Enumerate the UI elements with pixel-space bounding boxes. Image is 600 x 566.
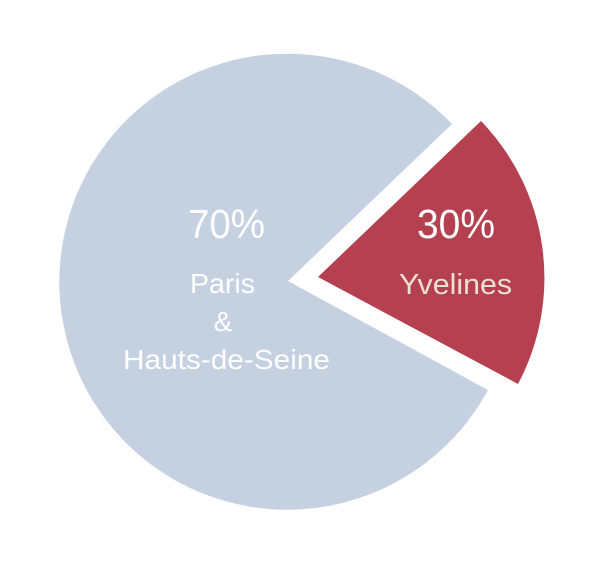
label: Yvelines: Yvelines (399, 269, 512, 301)
label: 30%: 30% (417, 201, 495, 247)
pie slice: 30% Yvelines (318, 121, 544, 384)
pie slice: 70% Paris & Hauts-de-Seine (59, 54, 488, 510)
label: Paris: Paris (190, 268, 255, 299)
label: Hauts-de-Seine: Hauts-de-Seine (123, 344, 330, 375)
label: ampersand: & (214, 306, 233, 337)
label: 70%: 70% (188, 201, 265, 247)
